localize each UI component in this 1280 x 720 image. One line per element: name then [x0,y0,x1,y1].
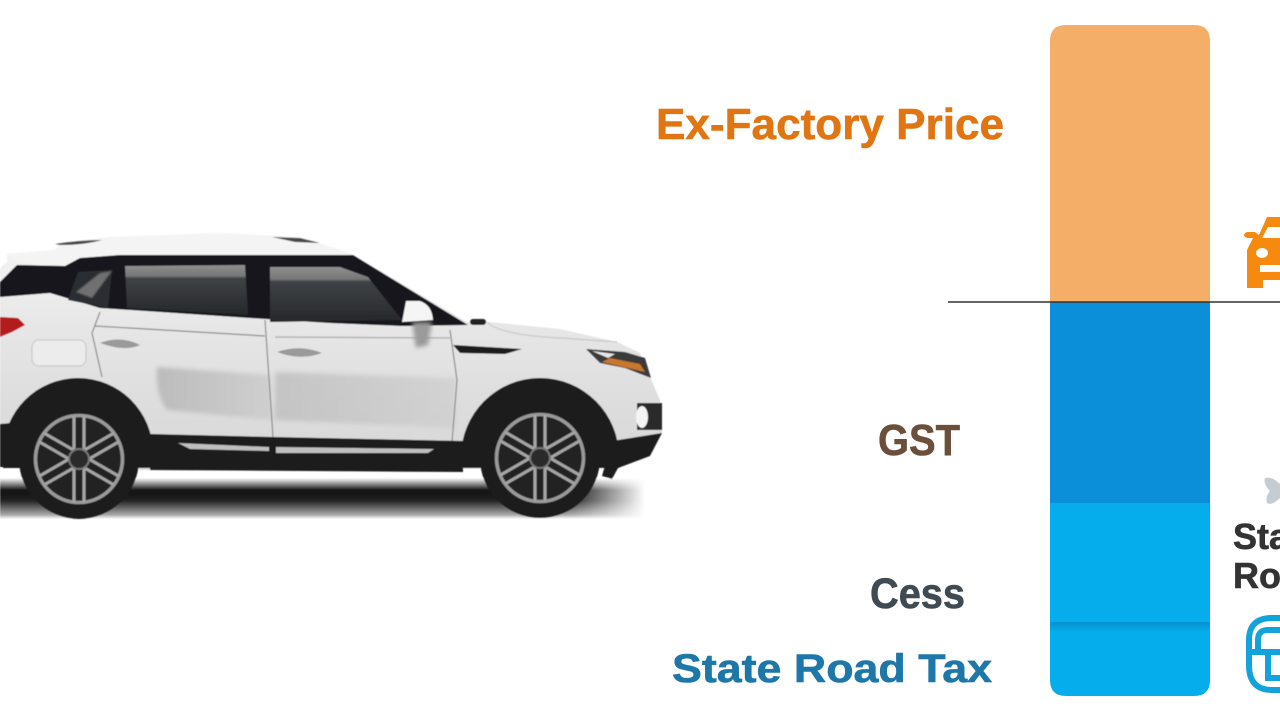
fender vent [453,345,522,354]
window band [0,255,468,326]
icon: orange car [1244,217,1280,288]
rear quarter glass [68,270,112,308]
lower door shade [157,367,272,420]
rear wheel [19,399,139,519]
divider line [948,301,1280,303]
label: cess: Cess [870,570,965,618]
text: state road (clipped) [1233,516,1280,596]
ground shadow [0,478,645,519]
label: GST: GST [878,416,960,465]
roof [7,233,350,266]
fog lamp [636,403,662,430]
front wheel arch [461,378,619,468]
label: state road tax: State Road Tax [672,647,992,691]
front wheel [480,398,600,518]
label: ex-factory price: Ex-Factory Price [656,100,1004,149]
roof rails [55,237,320,245]
stacked price bar [1050,25,1210,696]
tail light [0,317,25,337]
headlight [586,349,651,378]
side sill [150,434,463,472]
rear wheel arch [3,378,153,468]
chrome strips [178,443,434,453]
mirror base nub [470,319,486,325]
wing mirror [402,301,433,348]
front bumper [602,433,662,479]
icon: grey emblem [1265,478,1280,504]
car illustration [0,233,662,519]
icon: blue road tax badge [1249,618,1280,690]
rear bumper [0,422,22,467]
segment: GST [1050,302,1210,503]
door handles [100,339,322,357]
fuel lid [32,340,86,366]
segment divider band [1050,622,1210,632]
rear door glass [125,265,248,315]
car body [0,233,662,470]
segment: ex-factory price [1050,25,1210,302]
door seams [92,312,617,442]
front door glass [270,267,402,322]
segment: cess and road tax [1050,503,1210,696]
